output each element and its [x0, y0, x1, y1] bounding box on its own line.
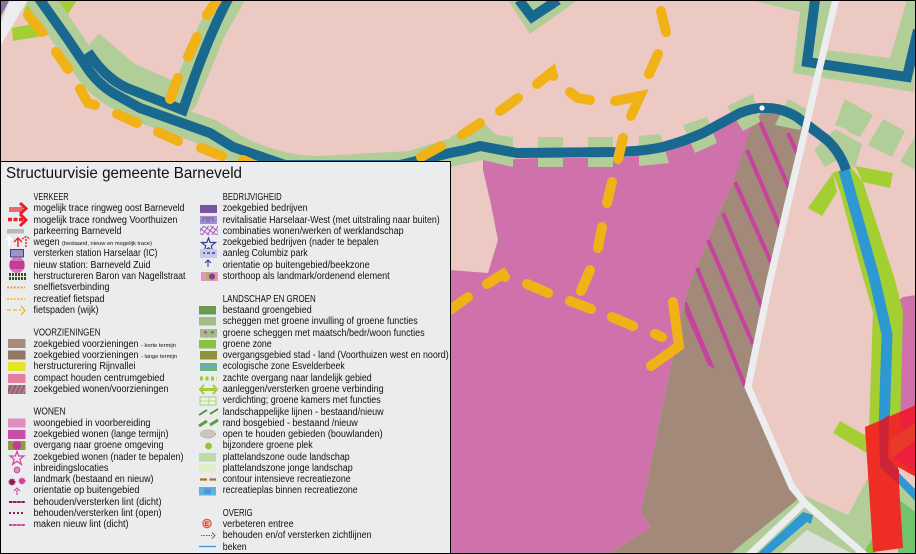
- legend item: mogelijk trace ringweg: mogelijk trace ringweg oost Barneveld: [34, 203, 184, 214]
- map: bicycle routes: [28, 0, 679, 366]
- legend item: wonen nader te bepalen: zoekgebied wonen (nader te bepalen): [34, 452, 184, 463]
- legend item: wonen/voorzieningen: zoekgebied wonen/voorzieningen: [34, 384, 168, 395]
- legend item: revitalisatie Harselaar-West: revitalisatie Harselaar-West (met uitstraling naar buiten): [223, 215, 440, 226]
- legend item: bestaand groengebied: bestaand groengebied: [223, 305, 312, 316]
- heading: voorzieningen: VOORZIENINGEN: [34, 328, 100, 338]
- map: diagonal hatching: [685, 122, 798, 386]
- legend item: open te houden gebieden: open te houden gebieden (bouwlanden): [223, 429, 383, 440]
- heading: landschap en groen: LANDSCHAP EN GROEN: [223, 294, 316, 305]
- legend item: orientatie op buitengebied: orientatie op buitengebied: [34, 485, 140, 496]
- heading: bedrijvigheid: BEDRIJVIGHEID: [223, 192, 282, 203]
- legend item: contour recreatiezone: contour intensieve recreatiezone: [223, 474, 351, 485]
- map: pink area masking east of road: [745, 0, 916, 554]
- legend item: zachte overgang: zachte overgang naar landelijk gebied: [223, 373, 372, 384]
- legend item: herstructureren Baron van Nagellstraat: herstructureren Baron van Nagellstraat: [34, 271, 186, 282]
- legend item: ecologische zone: ecologische zone Esvelderbeek: [223, 361, 345, 372]
- legend item: woongebied in voorbereiding: woongebied in voorbereiding: [33, 418, 150, 429]
- legend item: overgangsgebied: overgangsgebied stad - land (Voorthuizen west en noord): [223, 350, 449, 361]
- legend item: lint open: behouden/versterken lint (open): [34, 508, 162, 519]
- legend item: groene zone: [199, 339, 272, 350]
- legend item: wegen: (bestaand, nieuw en mogelijk trace): [62, 241, 152, 247]
- legend item: storthoop: storthoop als landmark/ordenend element: [223, 271, 390, 282]
- map: dashed green verges: [450, 94, 916, 170]
- legend item: verbeteren entree: E: [205, 521, 210, 528]
- legend item: orientatie op buitengebied/beekzone: orientatie op buitengebied/beekzone: [223, 260, 370, 271]
- legend item: overgang naar groene omgeving: overgang naar groene omgeving: [34, 440, 164, 451]
- legend item: fietspaden: [7, 305, 98, 316]
- legend item: inbreidingslocaties: inbreidingslocaties: [34, 463, 109, 474]
- legend item: groene zone: groene zone: [223, 339, 272, 350]
- legend item: compact houden centrumgebied: compact houden centrumgebied: [34, 373, 164, 384]
- legend item: verbeteren entree: verbeteren entree: [223, 519, 294, 530]
- legend item: nieuw station: nieuw station: Barneveld Zuid: [34, 260, 150, 271]
- heading: wonen: WONEN: [34, 406, 66, 418]
- legend item: lint dicht: behouden/versterken lint (dicht): [34, 497, 162, 508]
- legend item: nieuw station: [9, 257, 150, 273]
- legend item: plattelandszone oude landschap: plattelandszone oude landschap: [223, 452, 350, 463]
- legend item: voorzieningen lange termijn: - lange termijn: [141, 354, 177, 360]
- legend panel: [0, 162, 450, 554]
- legend item: beken: beken: [223, 542, 247, 553]
- legend item: rand bosgebied: rand bosgebied - bestaand /nieuw: [223, 418, 358, 429]
- heading: verkeer: VERKEER: [34, 192, 68, 203]
- legend item: snelfietsverbinding: snelfietsverbinding: [34, 282, 110, 293]
- legend item: scheggen: scheggen met groene invulling of groene functies: [223, 316, 418, 327]
- legend item: recreatieplas: recreatieplas binnen recreatiezone: [223, 485, 358, 496]
- legend item: zoekgebied bedrijven: zoekgebied bedrijven: [223, 203, 308, 214]
- legend item: mogelijk trace rondweg: mogelijk trace rondweg Voorthuizen: [34, 215, 178, 226]
- map: red ring road search zone: [865, 405, 916, 552]
- map: stream: [755, 170, 916, 554]
- legend item: herstructurering Rijnvallei: herstructurering Rijnvallei: [34, 361, 136, 372]
- legend item: wegen: wegen: [33, 237, 60, 248]
- legend item: groene verbinding: aanleggen/versterken groene verbinding: [223, 384, 384, 395]
- legend item: voorzieningen korte termijn: [8, 339, 176, 350]
- map: blue main roads: [38, 0, 916, 170]
- legend item: versterken station: versterken station Harselaar (IC): [34, 248, 158, 259]
- legend item: plattelandszone jonge landschap: plattelandszone jonge landschap: [223, 463, 353, 474]
- legend item: recreatief fietspad: recreatief fietspad: [34, 294, 104, 305]
- legend item: wonen nader te bepalen: [10, 452, 184, 464]
- legend item: aanleg Columbiz park: aanleg Columbiz park: [223, 248, 308, 259]
- legend item: verdichting: verdichting; groene kamers met functies: [223, 395, 381, 406]
- legend item: voorzieningen korte termijn: - korte termijn: [141, 343, 176, 349]
- legend item: zichtlijnen: behouden en/of versterken zichtlijnen: [223, 530, 372, 541]
- legend item: parkeerring: parkeerring Barneveld: [34, 226, 122, 237]
- legend item: bedrijven nader te bepalen: zoekgebied bedrijven (nader te bepalen: [223, 237, 379, 248]
- map: bottom right green zone: [730, 470, 916, 554]
- map: north ring green block: [508, 0, 916, 92]
- heading: overig: OVERIG: [223, 508, 253, 519]
- legend item: voorzieningen korte termijn: zoekgebied voorzieningen: [34, 339, 138, 350]
- legend item: bijzondere groene plek: bijzondere groene plek: [223, 440, 313, 451]
- legend item: voorzieningen lange termijn: [8, 350, 177, 361]
- legend item: fietspaden: fietspaden (wijk): [34, 305, 98, 316]
- legend item: nieuw lint: maken nieuw lint (dicht): [34, 519, 128, 530]
- legend item: wegen: [6, 236, 152, 248]
- map: facilities search area: [607, 10, 836, 554]
- legend item: landmark: landmark (bestaand en nieuw): [34, 474, 154, 485]
- legend item: bedrijven nader te bepalen: [202, 237, 379, 251]
- legend item: wonen lange termijn: zoekgebied wonen (lange termijn): [34, 429, 168, 440]
- legend item: beken: [199, 542, 247, 553]
- legend item: landschappelijke lijnen: landschappelijke lijnen - bestaand/nieuw: [223, 407, 384, 418]
- map: green road verges: [38, 0, 460, 170]
- map: east residential area: [893, 295, 916, 420]
- legend item: combinaties wonen/werken: combinaties wonen/werken of werklandschap: [223, 226, 404, 237]
- legend item: voorzieningen lange termijn: zoekgebied voorzieningen: [34, 350, 138, 361]
- legend title: Structuurvisie gemeente Barneveld: [6, 165, 242, 182]
- legend item: recreatief fietspad: [7, 294, 104, 305]
- map: green connection with arrow: [12, 0, 903, 455]
- legend item: groene scheggen: groene scheggen met maatsch/bedr/woon functies: [223, 328, 425, 339]
- map: white dot: [759, 105, 765, 111]
- map: residential search area: [450, 116, 758, 554]
